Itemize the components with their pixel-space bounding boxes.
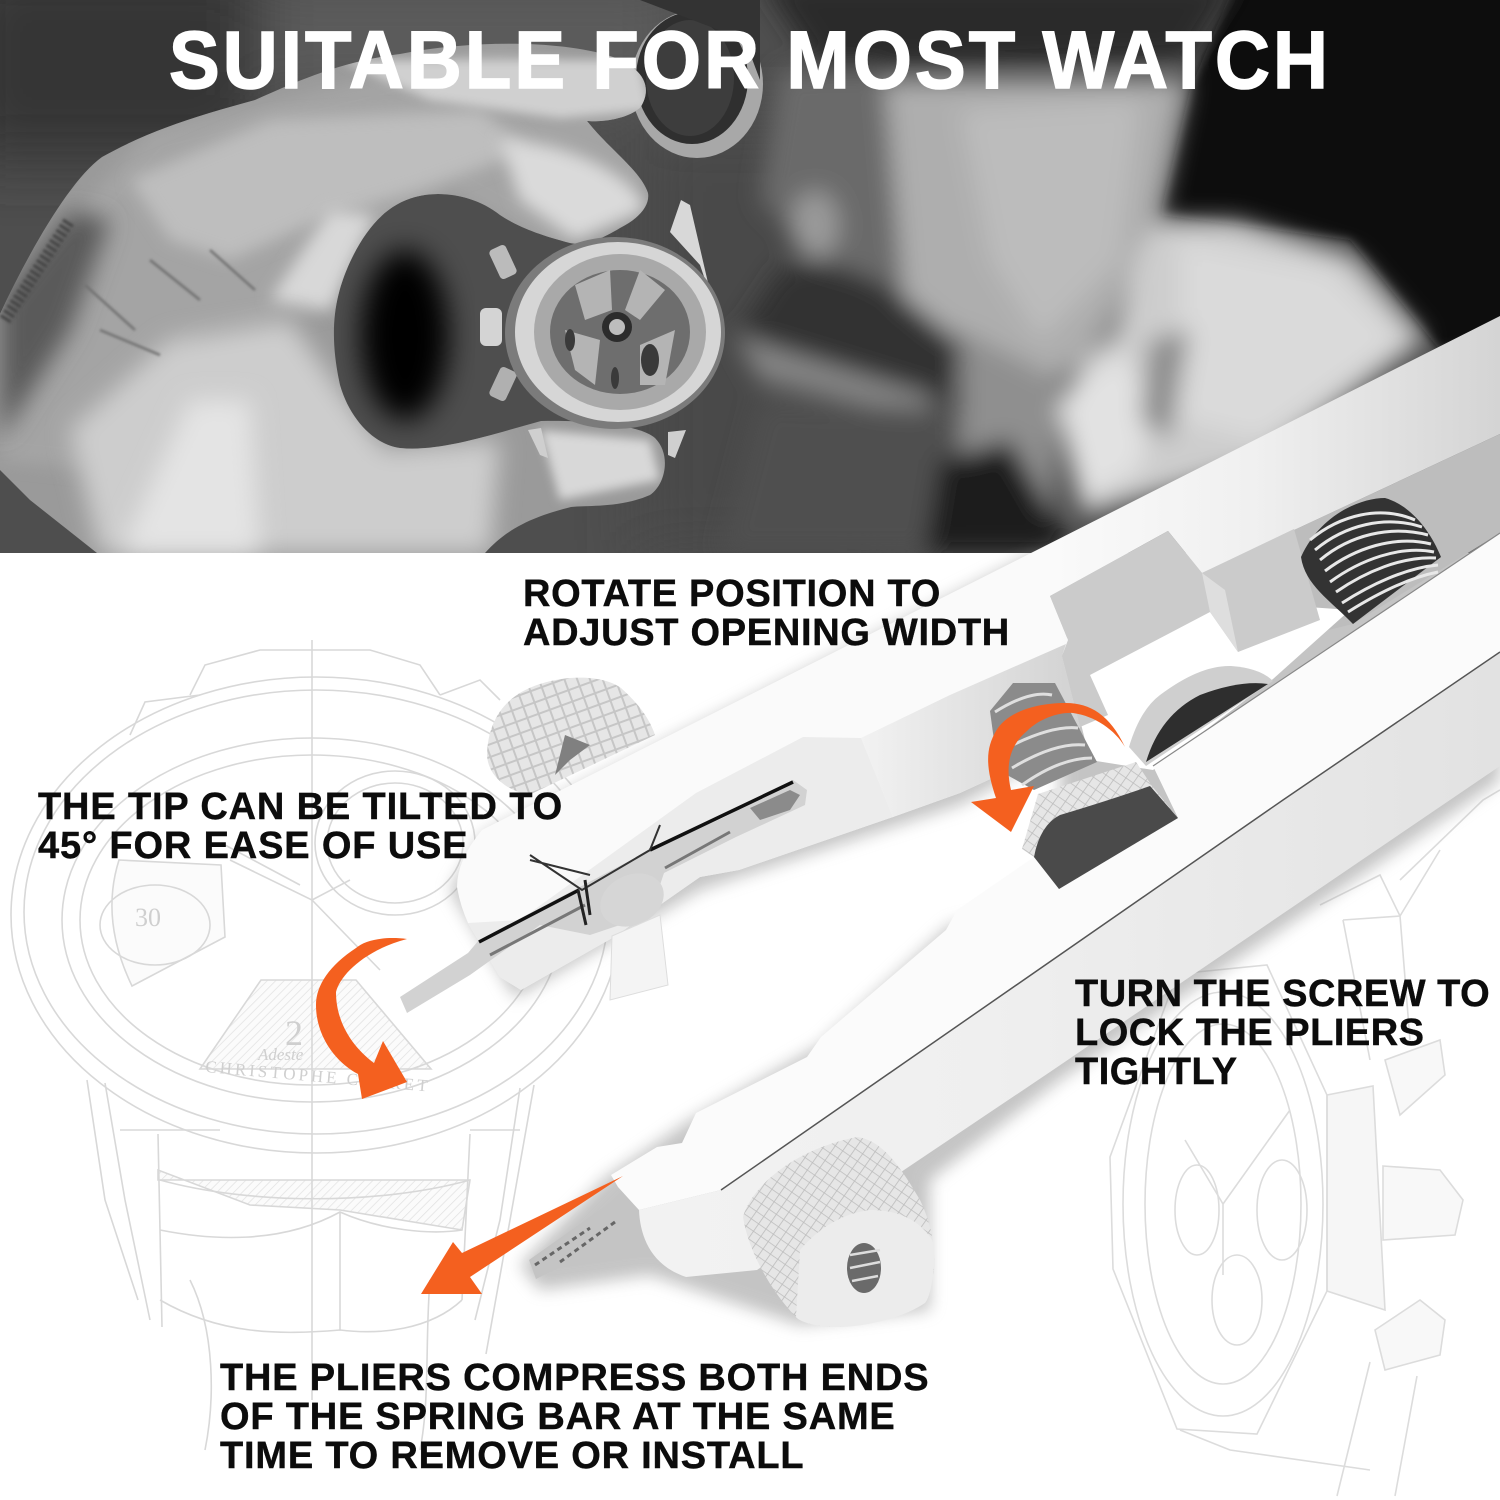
- photo: watchmaker holding a watch: [0, 0, 1500, 560]
- watch: [480, 200, 725, 458]
- caption: pliers compress: TIME TO REMOVE OR INSTALL: [220, 1435, 804, 1477]
- caption: rotate position: [523, 573, 1010, 654]
- lower tip: [529, 1197, 637, 1279]
- pliers: [400, 316, 1500, 1327]
- hand: [0, 44, 665, 553]
- disc: [1129, 666, 1273, 766]
- tilted tip: [400, 780, 807, 1013]
- sketch: small watch: [1110, 790, 1500, 1496]
- pliers shadow: [450, 500, 1500, 1325]
- caption: tip tilt: THE TIP CAN BE TILTED TO: [38, 786, 563, 828]
- blurred face and collar: [1160, 0, 1500, 350]
- title: SUITABLE FOR MOST WATCH: [169, 15, 1331, 106]
- lower arm top face: [611, 533, 1500, 1210]
- lower knob: [743, 1137, 935, 1327]
- caption: turn the screw: LOCK THE PLIERS: [1075, 1012, 1425, 1054]
- sketch lettering on dial: [135, 903, 431, 1096]
- rear spring: [1301, 498, 1441, 624]
- sketch: large watch: [11, 640, 621, 1450]
- caption: tip tilt: 45° FOR EASE OF USE: [38, 825, 468, 867]
- sketch lettering on dial: 2: [285, 1013, 303, 1053]
- caption: pliers compress: THE PLIERS COMPRESS BOTH ENDS: [220, 1357, 929, 1399]
- notch facet: [1050, 529, 1320, 727]
- caption: pliers compress: [220, 1357, 929, 1477]
- sketch lettering on dial: Adeste: [257, 1045, 304, 1064]
- caption: pliers compress: OF THE SPRING BAR AT THE SAME: [220, 1396, 896, 1438]
- caption: turn the screw: TIGHTLY: [1075, 1051, 1238, 1093]
- caption: rotate position: ADJUST OPENING WIDTH: [523, 612, 1010, 654]
- caption: tip tilt: [38, 786, 563, 867]
- interior of jaw: [1202, 434, 1500, 652]
- tooth of hidden knob under tip: [610, 915, 668, 1000]
- lower arm side face: [639, 652, 1500, 1277]
- upper arm: [457, 316, 1500, 990]
- caption: rotate position: ROTATE POSITION TO: [523, 573, 941, 615]
- arrow: compress: [421, 1176, 623, 1294]
- eye loupe: [631, 0, 763, 158]
- knurled rear knob: [487, 678, 655, 795]
- center screw: [990, 683, 1178, 889]
- gap between arms: [1060, 600, 1350, 770]
- hole between fingers: [361, 250, 449, 420]
- arrow: adjust: [971, 703, 1125, 832]
- sketch lettering on dial: CHRISTOPHE CLARET: [205, 1057, 431, 1096]
- caption: turn the screw: [1075, 973, 1490, 1093]
- arrow: tilt: [316, 938, 407, 1099]
- sketch lettering on dial: 30: [135, 903, 161, 932]
- caption: turn the screw: TURN THE SCREW TO: [1075, 973, 1490, 1015]
